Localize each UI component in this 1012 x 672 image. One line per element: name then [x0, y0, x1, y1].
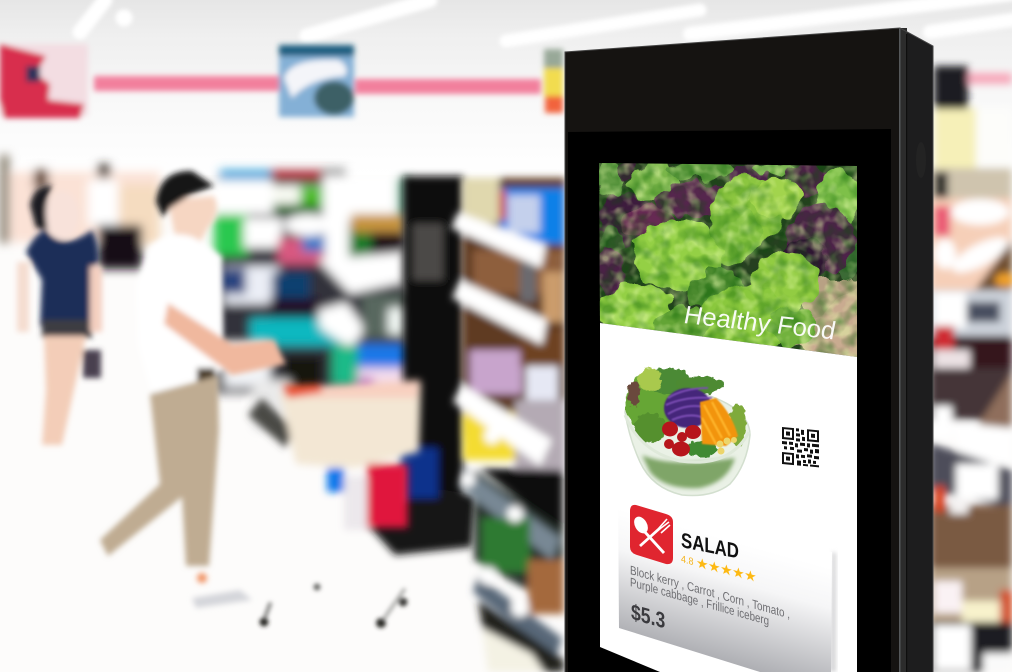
wall band and posters — [0, 44, 563, 118]
glass bowl — [625, 389, 750, 496]
card background — [618, 495, 832, 672]
icon: red fork and spoon — [630, 505, 673, 564]
right edge shelving — [930, 66, 1012, 672]
black gondola — [368, 176, 476, 555]
price: $5.3 — [631, 600, 665, 634]
man shopper — [100, 171, 286, 608]
salad bowl — [625, 368, 750, 496]
description: Block kerry , Carrot , Corn , Tomato , — [630, 564, 790, 622]
shopping cart — [248, 380, 421, 628]
carrot shreds — [700, 398, 738, 446]
screen headline: Healthy Food: Healthy Food — [684, 301, 836, 346]
purple cabbage — [664, 388, 712, 428]
glass rim — [625, 415, 749, 462]
ceiling lights — [80, 0, 1012, 41]
tomatoes — [662, 422, 701, 456]
left back wall area — [0, 155, 160, 269]
black screen bezel — [568, 129, 891, 672]
right shelving near kiosk — [451, 178, 565, 672]
heading: SALAD: SALAD — [681, 529, 739, 564]
QR code — [782, 427, 819, 467]
kiosk front frame — [565, 28, 900, 672]
kiosk body — [565, 28, 933, 672]
info card — [618, 495, 836, 672]
rating stars: ★★★★★ — [696, 555, 756, 586]
central shelving — [211, 170, 565, 672]
screen white panel — [600, 323, 857, 672]
screen photo: lettuce field — [595, 160, 865, 360]
salad greens — [626, 368, 746, 457]
corn — [716, 437, 737, 454]
card shadow — [830, 552, 836, 672]
rating value: 4.8 — [681, 554, 694, 568]
kiosk speaker grille — [916, 142, 926, 178]
central shelves: blurred base — [211, 170, 444, 430]
woman shopper — [17, 186, 102, 445]
kiosk side panel — [900, 28, 933, 672]
description: Purple cabbage , Frillice iceberg — [630, 576, 769, 629]
